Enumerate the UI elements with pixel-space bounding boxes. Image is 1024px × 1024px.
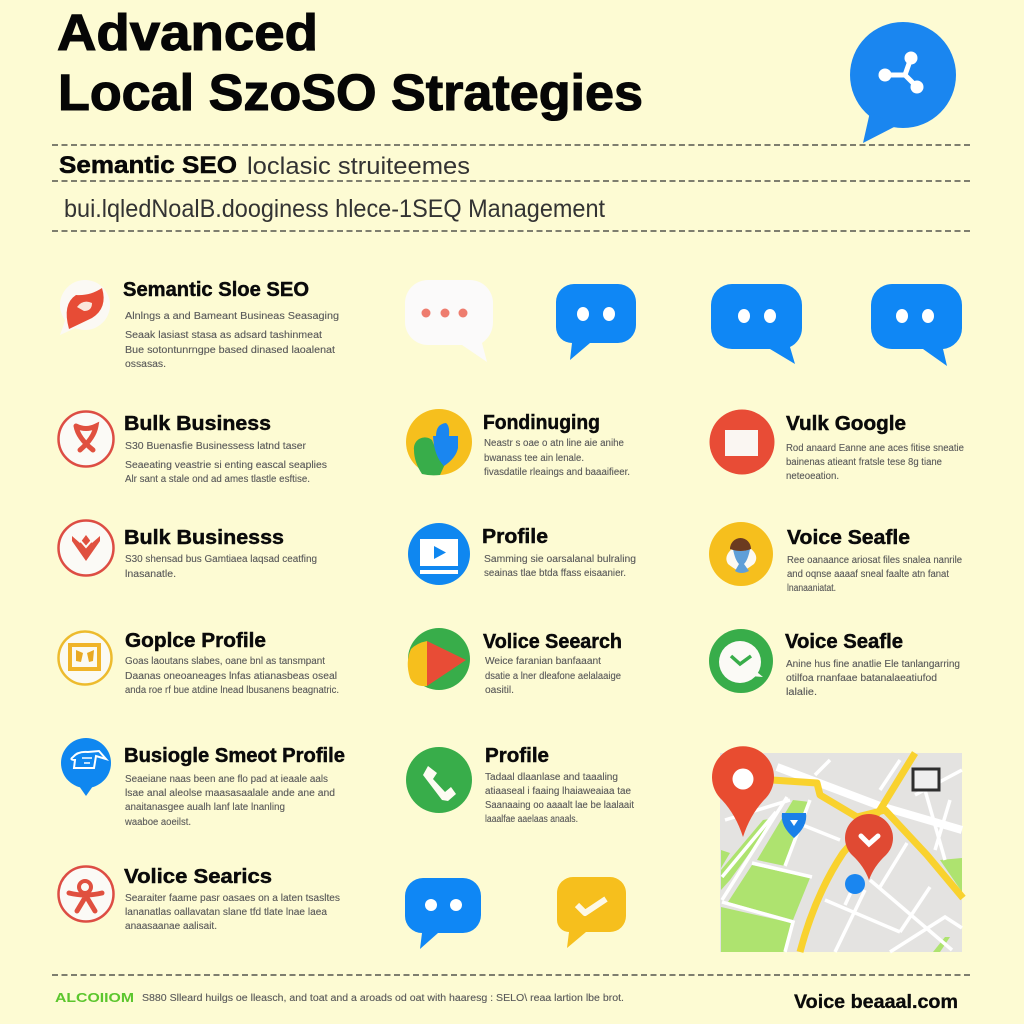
body text	[484, 438, 630, 478]
body text: Goas laoutans slabes, oane bnl as tansmpant	[125, 656, 325, 667]
panel: chat bubbles row	[405, 280, 962, 366]
heading: Bulk Businesss	[124, 527, 284, 549]
body text	[485, 772, 634, 825]
body text: Neastr s oae o atn line aie anihe	[484, 438, 624, 449]
icon: blue pin with box	[61, 738, 111, 796]
footer website: Voice beaaal.com	[794, 992, 958, 1013]
body text: Seaeiane naas been ane flo pad at ieaale aals	[125, 774, 328, 785]
body text	[125, 893, 340, 932]
heading: Vulk Google	[786, 413, 906, 435]
body text: Tadaal dlaanlase and taaaling	[485, 772, 618, 783]
body text	[125, 441, 327, 485]
body text: lananatlas oallavatan slane tfd tlate lnae laea	[125, 907, 327, 918]
body text: seainas tlae btda ffass eisaanier.	[484, 568, 626, 579]
icon: red chat blob	[60, 280, 110, 335]
heading: Volice Searics	[124, 866, 272, 888]
icon: blue bubble bottom	[405, 878, 481, 949]
icon: large red pin	[712, 746, 774, 837]
title: Local SzoSO Strategies	[58, 64, 643, 121]
icon: black rectangle marker	[913, 769, 939, 790]
body text: Saanaaing oo aaaalt lae be laalaait	[485, 800, 634, 811]
panel: Profile (video)	[408, 523, 636, 585]
icon: red chevron heart	[58, 520, 114, 576]
panel: Goplce Profile	[58, 630, 339, 696]
body text: atiaaseal i faaing lhaiaweaiaa tae	[485, 786, 631, 797]
body text: fivasdatile rleaings and baaaifieer.	[484, 467, 630, 478]
icon: white bubble	[405, 280, 493, 362]
body text	[124, 774, 335, 828]
footer note: S880 Slleard huilgs oe lleasch, and toat and a aroads od oat with haaresg : SELO\ reaa lartion lbe brot.	[142, 993, 624, 1004]
body text	[125, 656, 339, 696]
subtitle line 1: loclasic struiteemes	[247, 153, 470, 180]
icon: yellow circle with green and blue shapes	[406, 409, 472, 475]
body text: dsatie a lner dleafone aelalaaige	[485, 671, 621, 682]
icon: yellow circle with figure	[709, 522, 773, 586]
body text: Alnlngs a and Bameant Busineas Seasaging	[125, 311, 339, 322]
body text	[787, 555, 962, 594]
body text: otilfoa rnanfaae batanalaeatiufod	[786, 673, 937, 684]
icon: red pin with check	[845, 814, 893, 880]
heading: Voice Seafle	[785, 631, 903, 653]
body text: Ree oanaance ariosat files snalea nanrile	[787, 555, 962, 566]
body text: Anine hus fine anatlie Ele tanlangarring	[786, 659, 960, 670]
icon: blue chat bubble with network	[850, 22, 956, 143]
body text: Rod anaard Eanne ane aces fitise sneatie	[786, 443, 964, 454]
heading: Busiogle Smeot Profile	[124, 745, 345, 767]
panel: Bulk Businesss	[58, 520, 317, 580]
body text: waaboe aoeilst.	[124, 817, 191, 828]
body text: Weice faranian banfaaant	[485, 656, 601, 667]
heading: Semantic Sloe SEO	[123, 279, 309, 301]
icon: green yellow red play	[408, 628, 470, 690]
heading: Voice Seafle	[787, 527, 910, 549]
body text: Searaiter faame pasr oasaes on a laten tsasltes	[125, 893, 340, 904]
heading: Profile	[485, 745, 549, 767]
body text	[786, 659, 960, 698]
body text: and oqnse aaaaf sneal faalte atn fanat	[787, 569, 949, 580]
icon: yellow check bubble	[557, 877, 626, 948]
subtitle line 1: Semantic SEO	[59, 152, 237, 179]
panel: Vulk Google	[710, 410, 964, 482]
icon: blue bubble 2	[711, 284, 802, 364]
heading: Goplce Profile	[125, 630, 266, 652]
icon: green circle with check bubble	[709, 629, 773, 693]
body text: lsae anal aleolse maasasaalale ande ane and	[125, 788, 335, 799]
heading: Profile	[482, 526, 548, 548]
icon: small blue pin	[782, 813, 806, 838]
body text: S30 Buenasfie Businessess latnd taser	[125, 441, 307, 452]
body text	[125, 554, 317, 580]
body text: bainenas atieant fratsle tese 8g tiane	[786, 457, 942, 468]
icon: blue bubble 1	[556, 284, 636, 360]
body text: Samming sie oarsalanal bulraling	[484, 554, 636, 565]
map green blocks	[721, 800, 962, 952]
icon: green phone	[406, 747, 472, 813]
icon: red ribbon	[58, 412, 114, 466]
body text	[125, 311, 339, 370]
body text: Seaeating veastrie si enting eascal seaplies	[125, 460, 327, 471]
body text: bwanass tee ain lenale.	[484, 453, 584, 464]
body text: S30 shensad bus Gamtiaea laqsad ceatfing	[125, 554, 317, 565]
icon: red figure	[58, 866, 114, 922]
body text	[786, 443, 964, 482]
body text: neteoeation.	[786, 471, 839, 482]
icon: yellow frame	[58, 632, 112, 684]
body text: Alr sant a stale ond ad ames tlastle esftise.	[125, 474, 310, 485]
heading: Volice Seearch	[483, 631, 622, 653]
body text: Daanas oneoaneages lnfas atianasbeas oseal	[125, 671, 337, 682]
body text: Bue sotontunrngpe based dinased laoalenat	[125, 345, 335, 356]
footer	[55, 990, 958, 1013]
panel: Profile (phone)	[406, 745, 634, 825]
body text: laaalfae aaelaas anaals.	[485, 814, 578, 825]
body text: lnasanatle.	[125, 569, 176, 580]
body text: oasitil.	[485, 685, 514, 696]
subtitle line 2: bui.lqledNoalB.dooginess hlece-1SEQ Management	[64, 195, 605, 223]
panel: Semantic Sloe SEO	[60, 279, 339, 370]
icon: blue bubble 3	[871, 284, 962, 366]
body text: anaitanasgee aualh lanf late lnanling	[125, 802, 285, 813]
body text: anda roe rf bue atdine lnead lbusanens beagnatric.	[125, 685, 339, 696]
panel: Volice Searics	[58, 866, 340, 932]
icon: blue circle with player	[408, 523, 470, 585]
title: Advanced	[57, 4, 318, 61]
subtitle line 1	[59, 152, 470, 180]
panel: Voice Seafle (green)	[709, 629, 960, 698]
icon: red circle with card	[710, 410, 774, 474]
body text: ossasas.	[125, 359, 166, 370]
body text	[485, 656, 621, 696]
panel: Fondinuging	[406, 409, 630, 478]
panel: Bulk Business	[58, 412, 327, 485]
body text: anaasaanae aalisait.	[125, 921, 217, 932]
title	[57, 4, 643, 121]
panel: Voice Seafle (yellow)	[709, 522, 962, 594]
heading: Bulk Business	[124, 413, 271, 435]
panel: Voice Seearch	[408, 628, 622, 696]
body text: lalalie.	[786, 687, 817, 698]
panel: Busiogle Smeot Profile	[61, 738, 345, 828]
icon: blue location dot	[845, 874, 865, 894]
heading: Fondinuging	[483, 412, 600, 434]
body text: Seaak lasiast stasa as adsard tashinmeat	[125, 330, 322, 341]
footer brand: ALCOIIOM	[55, 990, 134, 1005]
body text: lnanaaniatat.	[787, 583, 836, 594]
map illustration	[712, 746, 963, 952]
body text	[484, 554, 636, 579]
